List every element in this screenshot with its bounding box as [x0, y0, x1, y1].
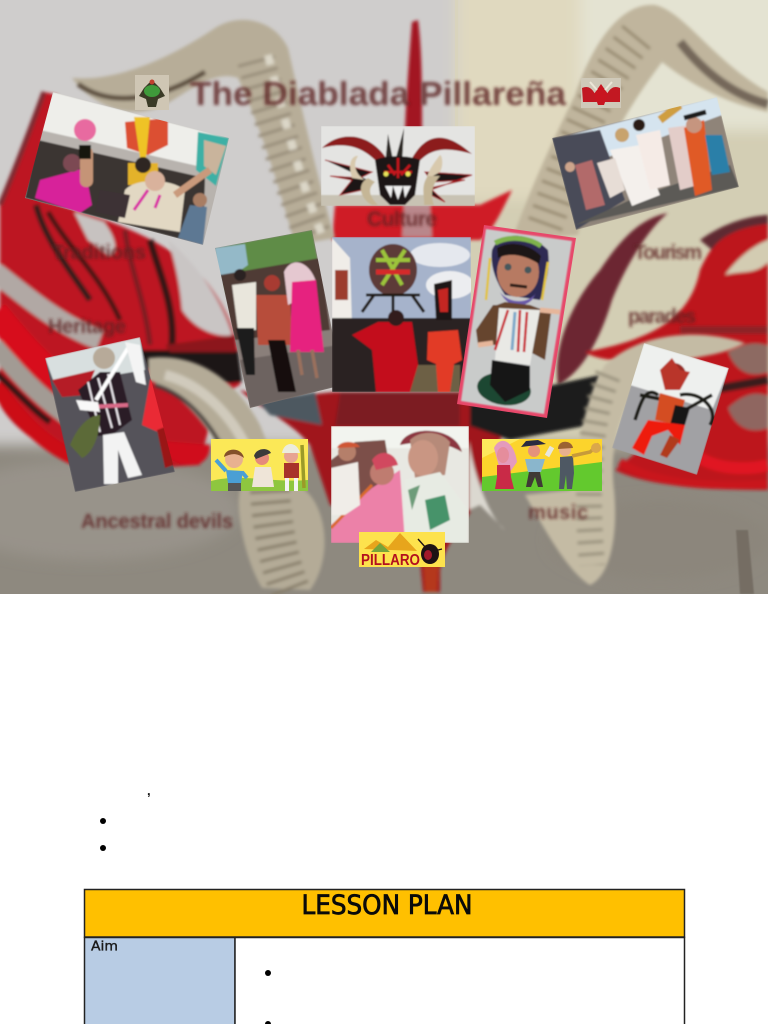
- horn: upper right: [512, 5, 768, 240]
- table header: LESSON PLAN: [302, 890, 472, 921]
- lesson plan table: [84, 890, 684, 1024]
- label: Heritage: Heritage: [48, 316, 126, 338]
- illustration: cartoon singer and trumpet player: [482, 439, 602, 491]
- horn: upper left: [72, 20, 335, 245]
- label: parades: parades: [628, 306, 696, 328]
- photo: dancers with raised arms: [20, 90, 235, 250]
- icon: red devil mask: [581, 78, 621, 108]
- mask: left red flames: [0, 92, 242, 470]
- logo: Pillaro: [359, 532, 445, 569]
- photo: devil figurine doll: [457, 225, 576, 418]
- logo: Pillaro: PILLARO: [361, 552, 420, 569]
- icon: green devil mask: [135, 75, 169, 110]
- photo: devil mask: [321, 126, 475, 206]
- table header: [84, 890, 684, 937]
- background photo: wall and floor: [0, 0, 768, 594]
- label: Traditions: Traditions: [52, 242, 146, 264]
- photo: masked dancer with branches: [45, 337, 175, 492]
- photo: dancers in hats and pink costume: [331, 426, 469, 543]
- title: The Diablada Pillareña: [190, 75, 567, 112]
- horn: lower left: [148, 357, 325, 590]
- label: music: music: [528, 502, 588, 524]
- mask: right red flames: [557, 213, 768, 490]
- illustration: cartoon boy, girl and man: [211, 439, 308, 491]
- horn: lower right: [525, 335, 745, 585]
- aim cell: Aim: [91, 938, 118, 954]
- label: Tourism: Tourism: [634, 242, 702, 264]
- photo: group of children in costume: [552, 97, 739, 230]
- photo: masked diablada dancers: [332, 237, 474, 392]
- stray comma: ,: [147, 783, 151, 798]
- label: Ancestral devils: Ancestral devils: [81, 511, 233, 533]
- bullet list: [100, 818, 106, 851]
- photo: red devil dancer: [612, 343, 729, 475]
- label: Culture: Culture: [367, 208, 437, 231]
- photo: couple in pink walking: [215, 230, 333, 408]
- aim cell: [84, 938, 235, 1024]
- aim content cell: [235, 938, 684, 1024]
- poster: diablada collage: [0, 0, 768, 594]
- mask: centre red body and spike: [240, 20, 600, 592]
